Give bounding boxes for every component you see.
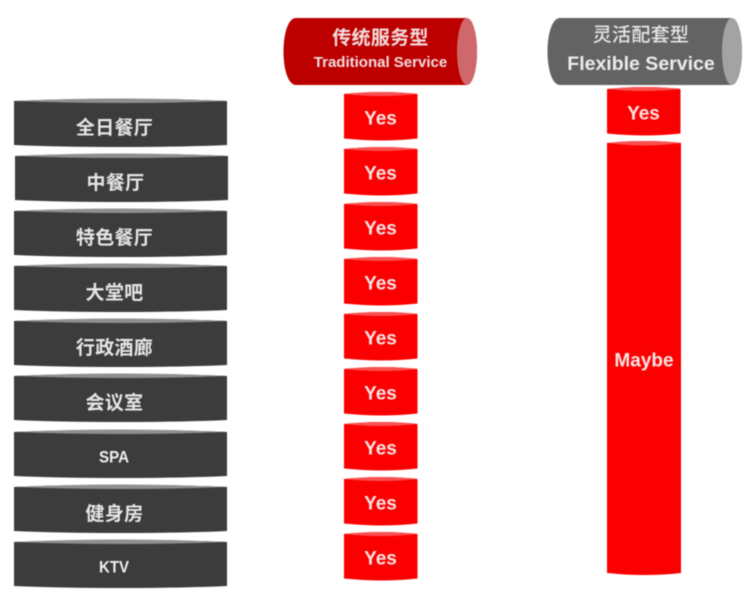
yes cell 7 (344, 422, 418, 470)
row: 全日餐厅 (14, 98, 227, 147)
row: KTV (14, 540, 227, 588)
header: flexible service (548, 18, 742, 85)
row: 中餐厅: 中餐厅 (87, 172, 144, 194)
yes cell 5: Yes (364, 328, 397, 350)
yes cell 3 (344, 202, 418, 250)
cylinder end cap (457, 18, 477, 85)
header title: 传统服务型 (332, 26, 429, 49)
header subtitle: Flexible Service (567, 53, 715, 75)
flexible service yes cell: Yes (627, 104, 660, 124)
yes cell 3: Yes (364, 218, 397, 240)
yes cell 4: Yes (364, 274, 397, 294)
yes cell 9: Yes (364, 548, 397, 570)
flexible service maybe column: Maybe (614, 350, 674, 372)
yes cell 8 (344, 477, 418, 526)
row: 健身房 (14, 484, 227, 533)
yes cell 8: Yes (364, 494, 397, 514)
row: 大堂吧: 大堂吧 (86, 282, 143, 304)
row: 行政酒廊 (14, 318, 227, 367)
traditional service yes column (344, 92, 418, 580)
row: 大堂吧 (14, 264, 227, 312)
row: 会议室: 会议室 (86, 391, 143, 414)
row: SPA: SPA (99, 448, 129, 466)
row: 特色餐厅 (14, 208, 227, 257)
facility rows (14, 98, 228, 588)
yes cell 1: Yes (364, 108, 397, 130)
row: 全日餐厅: 全日餐厅 (76, 116, 153, 139)
row: 特色餐厅: 特色餐厅 (76, 227, 153, 249)
row: 健身房: 健身房 (86, 503, 143, 525)
yes cell 6: Yes (364, 384, 397, 404)
header title: 灵活配套型 (593, 24, 689, 46)
row: SPA (14, 430, 227, 478)
header subtitle: Traditional Service (314, 54, 447, 71)
yes cell 2: Yes (364, 164, 397, 184)
yes cell 2 (344, 147, 418, 196)
flexible service maybe column (607, 141, 681, 575)
row: 会议室 (14, 374, 227, 422)
row: 中餐厅 (15, 154, 228, 202)
yes cell 1 (344, 92, 418, 140)
yes cell 5 (344, 312, 418, 360)
row: 行政酒廊: 行政酒廊 (76, 337, 153, 359)
yes cell 6 (344, 367, 418, 416)
header: traditional service (284, 18, 477, 85)
flexible service yes cell (607, 87, 680, 136)
yes cell 7: Yes (364, 438, 397, 460)
row: KTV: KTV (99, 558, 130, 576)
cylinder end cap (722, 18, 742, 85)
yes cell 4 (344, 257, 418, 306)
yes cell 9 (344, 532, 418, 580)
